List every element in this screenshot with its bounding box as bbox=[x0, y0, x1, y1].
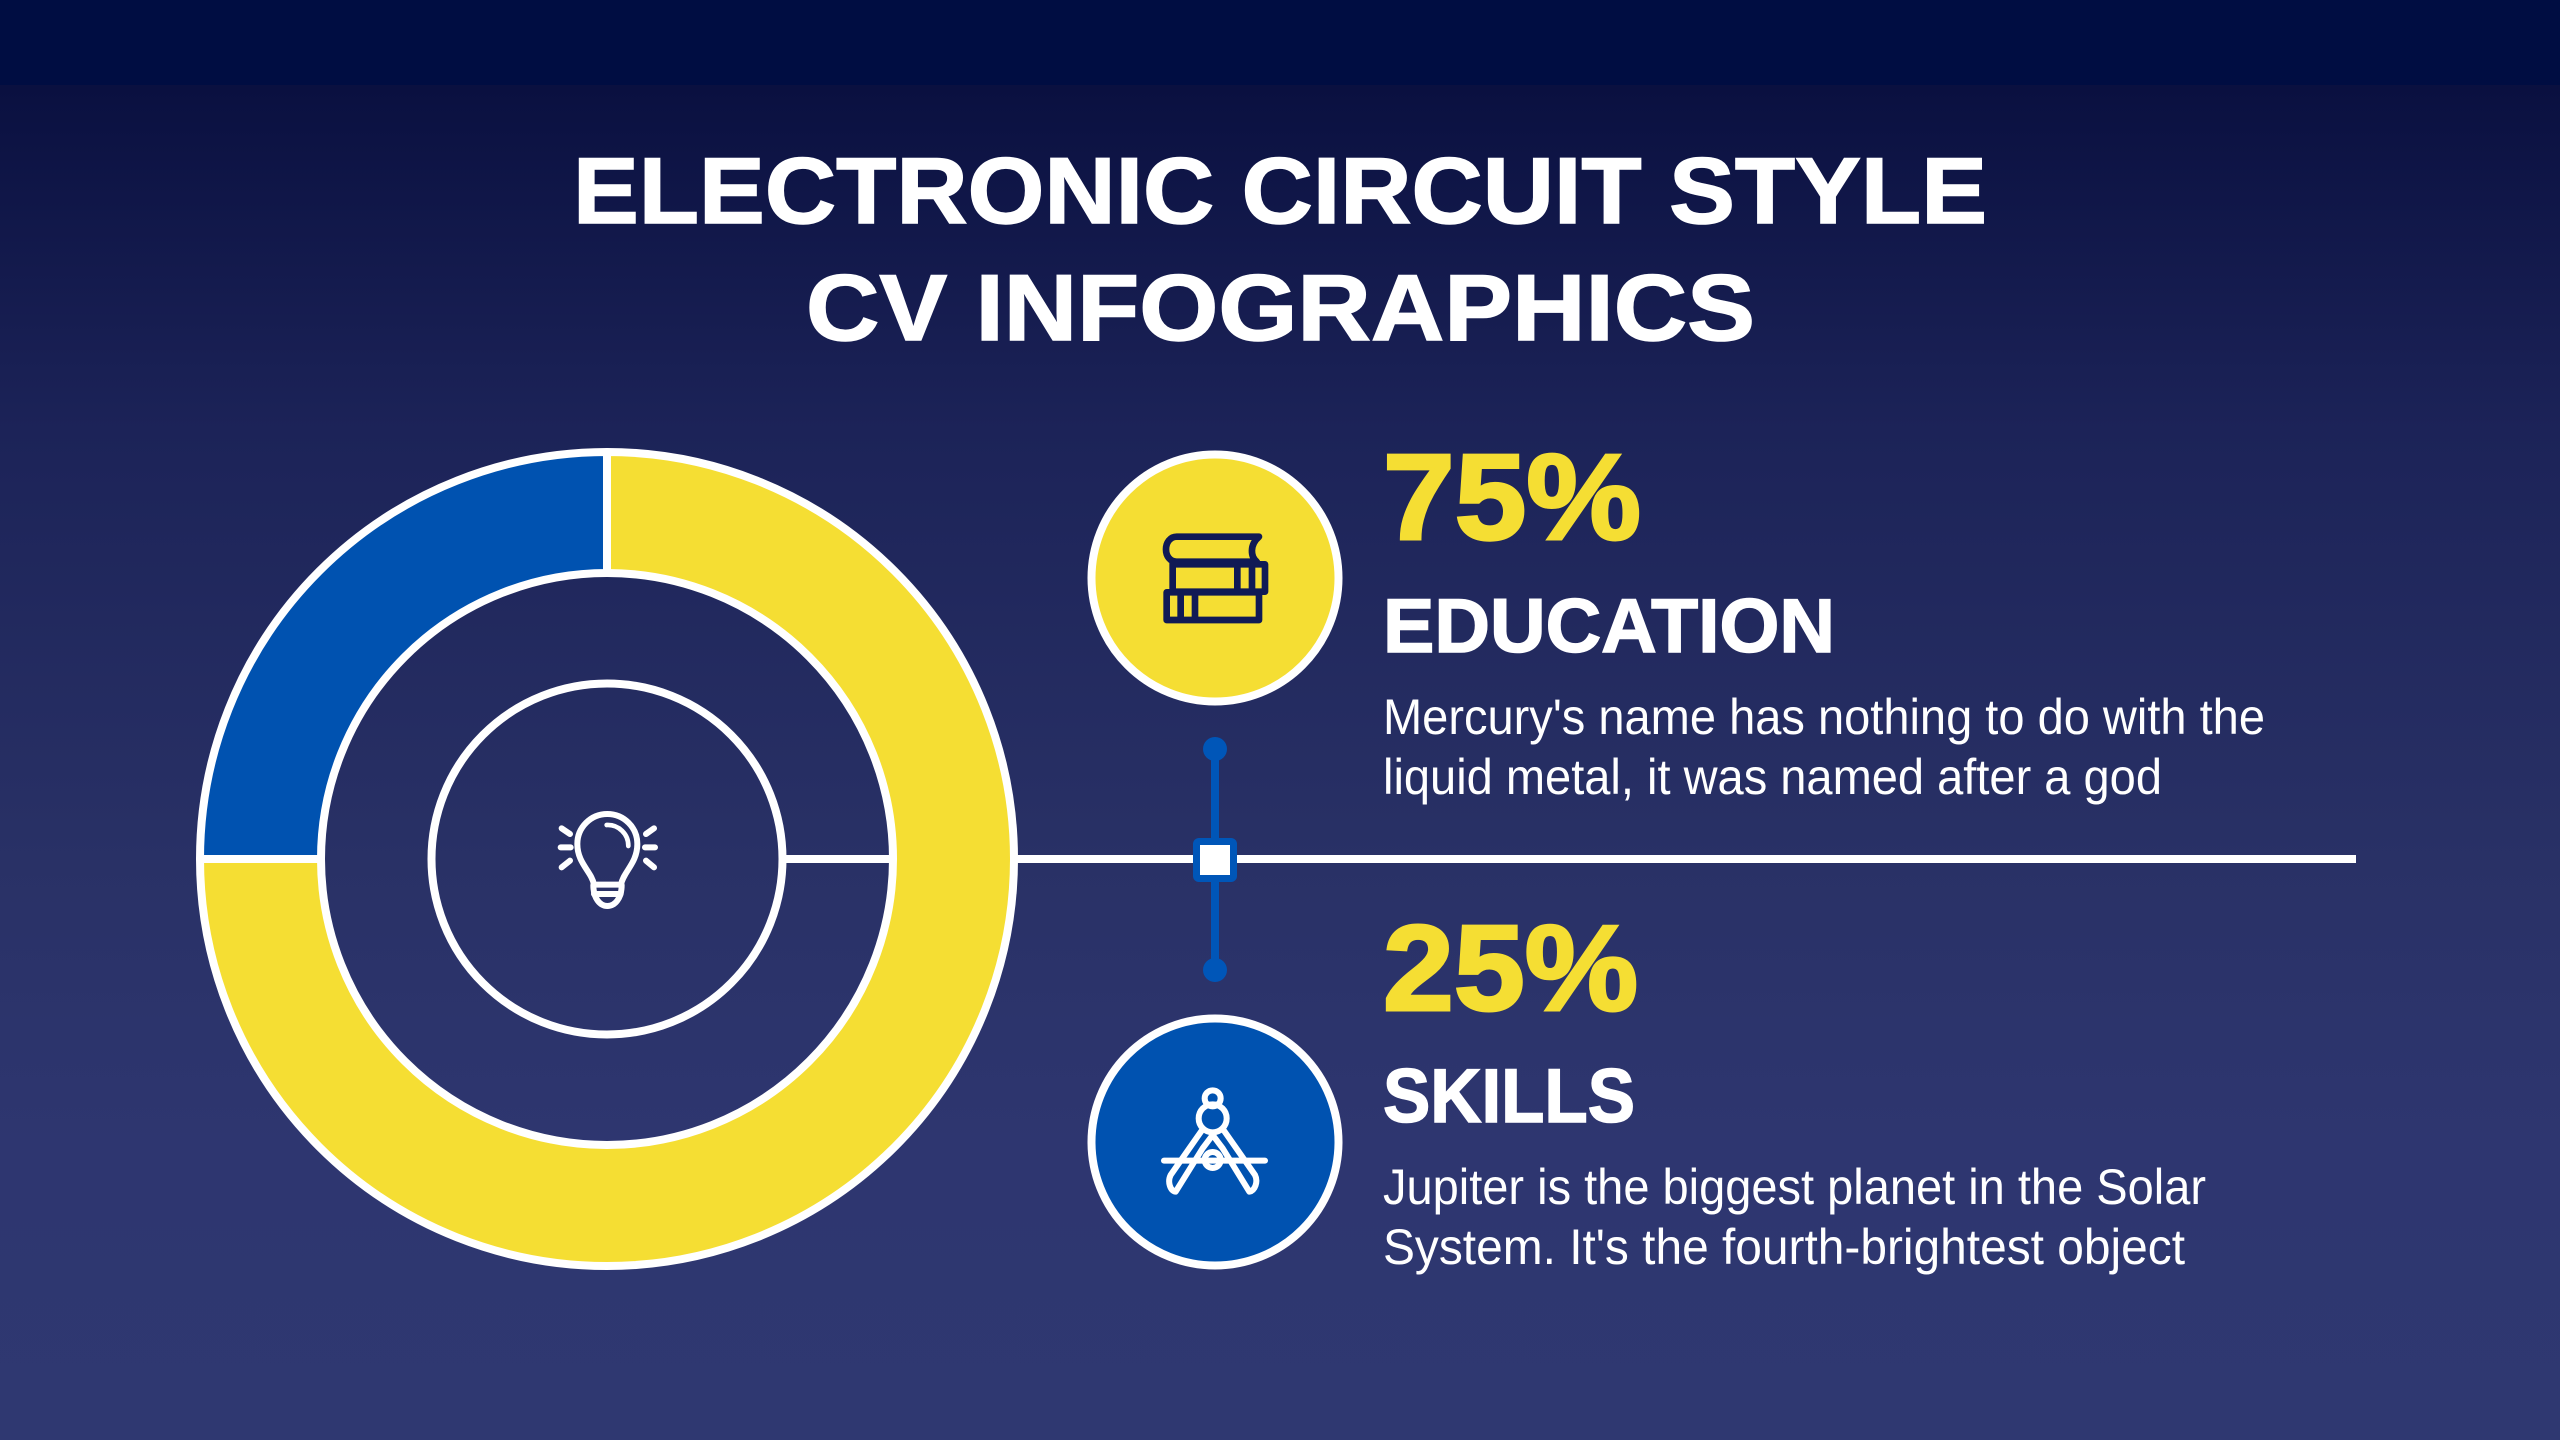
skills text block: System. It's the fourth-brightest object bbox=[1383, 1219, 2185, 1275]
title bbox=[573, 138, 1987, 360]
circuit node with vertical connector bbox=[1193, 737, 1237, 982]
education text block: EDUCATION bbox=[1383, 584, 1835, 669]
title: ELECTRONIC CIRCUIT STYLE bbox=[573, 138, 1987, 243]
inner ring bbox=[432, 684, 782, 1034]
education text block bbox=[1383, 429, 2265, 805]
skills text block bbox=[1383, 900, 2206, 1275]
icon badge: skills compass bbox=[1092, 1018, 1338, 1266]
education text block: liquid metal, it was named after a god bbox=[1383, 749, 2162, 805]
donut chart bbox=[200, 452, 1014, 1266]
skills text block: Jupiter is the biggest planet in the Solar bbox=[1383, 1159, 2206, 1215]
icon: light bulb bbox=[561, 814, 655, 906]
segment: skills 25% bbox=[200, 452, 607, 859]
education text block: 75% bbox=[1383, 429, 1641, 565]
education text block: Mercury's name has nothing to do with the bbox=[1383, 689, 2265, 745]
horizontal connector line bbox=[1014, 855, 2356, 863]
skills text block: 25% bbox=[1383, 900, 1638, 1036]
title: CV INFOGRAPHICS bbox=[806, 255, 1755, 360]
inner connector bbox=[782, 855, 892, 863]
segment: education 75% bbox=[200, 452, 1014, 1266]
icon badge: education books bbox=[1092, 454, 1338, 702]
skills text block: SKILLS bbox=[1383, 1054, 1635, 1139]
